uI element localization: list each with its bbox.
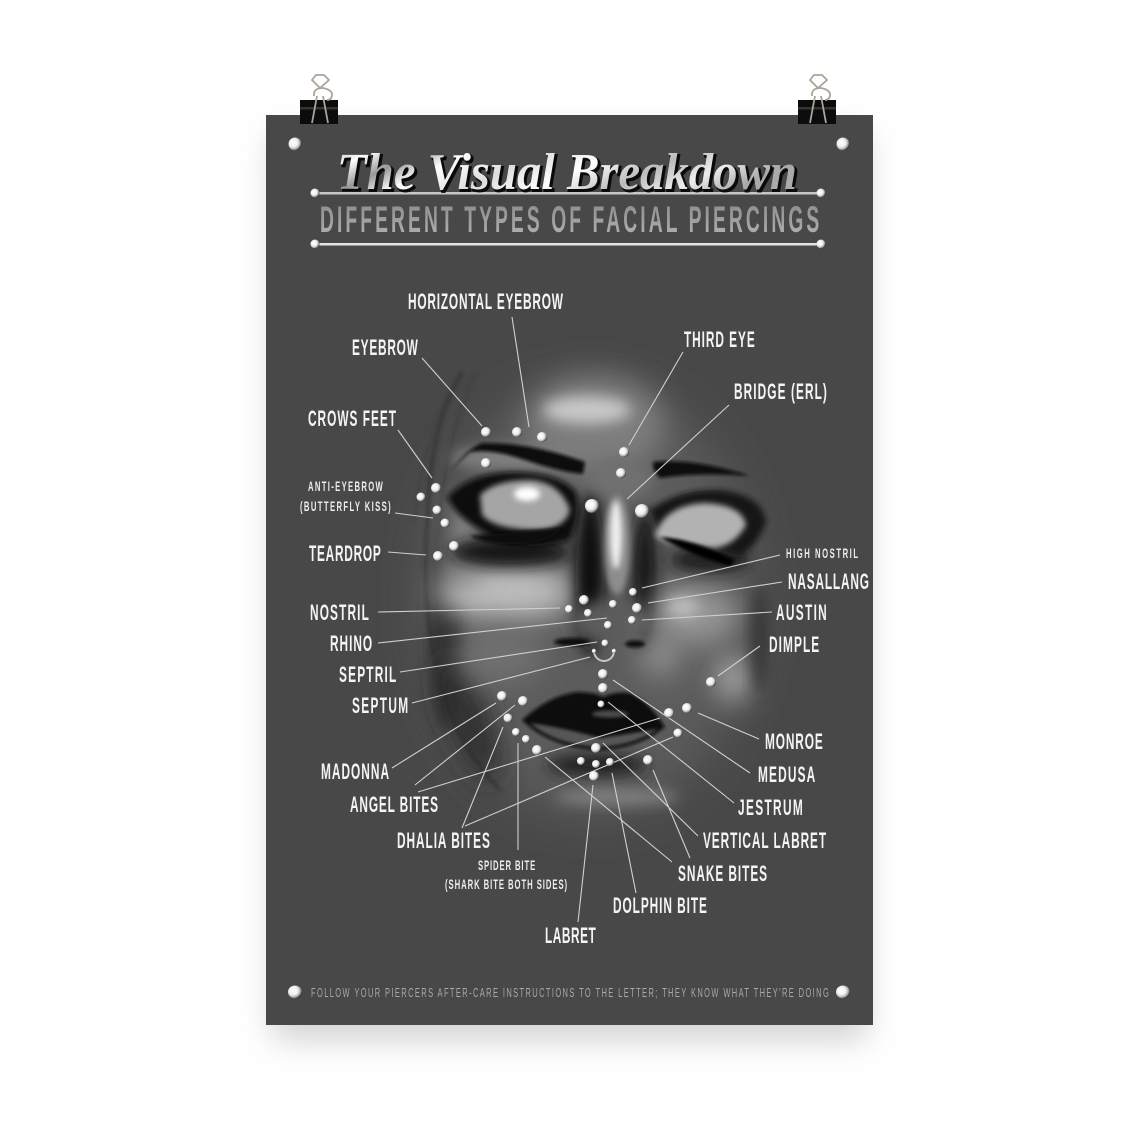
labels: HIGH NOSTRIL <box>786 547 858 562</box>
poster shadow <box>272 135 867 1040</box>
labels: DOLPHIN BITE <box>613 893 707 918</box>
labels: THIRD EYE <box>684 327 755 352</box>
title: The Visual Breakdown <box>337 144 797 201</box>
panel: poster <box>266 115 873 1025</box>
labels: RHINO <box>330 631 372 656</box>
labels: MONROE <box>765 729 823 754</box>
face illustration <box>415 372 768 815</box>
labels <box>300 289 869 948</box>
labels: ANTI-EYEBROW <box>308 480 383 495</box>
labels: EYEBROW <box>352 335 418 360</box>
labels: MEDUSA <box>758 762 815 787</box>
labels: BRIDGE (ERL) <box>734 379 827 404</box>
labels: MADONNA <box>321 759 389 784</box>
labels: CROWS FEET <box>308 406 396 431</box>
labels: NOSTRIL <box>310 600 369 625</box>
labels: ANGEL BITES <box>350 792 438 817</box>
labels: DHALIA BITES <box>397 828 490 853</box>
labels: SEPTUM <box>352 693 408 718</box>
labels: SPIDER BITE <box>478 859 536 874</box>
nostrils <box>554 638 645 648</box>
labels: LABRET <box>545 923 596 948</box>
icon: left binder clip <box>300 75 338 124</box>
labels: AUSTIN <box>776 600 827 625</box>
eyebrows <box>450 443 750 478</box>
labels: (BUTTERFLY KISS) <box>300 500 391 515</box>
labels: TEARDROP <box>309 541 381 566</box>
subtitle: DIFFERENT TYPES OF FACIAL PIERCINGS <box>320 199 819 241</box>
title: The Visual Breakdown <box>339 146 799 203</box>
labels: SNAKE BITES <box>678 861 767 886</box>
labels: HORIZONTAL EYEBROW <box>408 289 563 314</box>
left eye <box>447 472 578 546</box>
piercing studs <box>416 427 716 781</box>
lips <box>522 692 665 776</box>
corner pins <box>288 138 850 998</box>
labels: NASALLANG <box>788 569 869 594</box>
leader lines <box>378 317 782 922</box>
right eye <box>650 490 766 572</box>
labels: SEPTRIL <box>339 662 396 687</box>
footer note: FOLLOW YOUR PIERCERS AFTER-CARE INSTRUCTIONS TO THE LETTER; THEY KNOW WHAT THEY'RE DOING <box>311 987 829 1001</box>
labels: DIMPLE <box>769 632 819 657</box>
title rules <box>310 188 826 248</box>
labels: (SHARK BITE BOTH SIDES) <box>445 878 567 893</box>
labels: VERTICAL LABRET <box>703 828 826 853</box>
septum ring <box>592 649 616 661</box>
labels: JESTRUM <box>738 795 803 820</box>
icon: right binder clip <box>798 75 836 124</box>
